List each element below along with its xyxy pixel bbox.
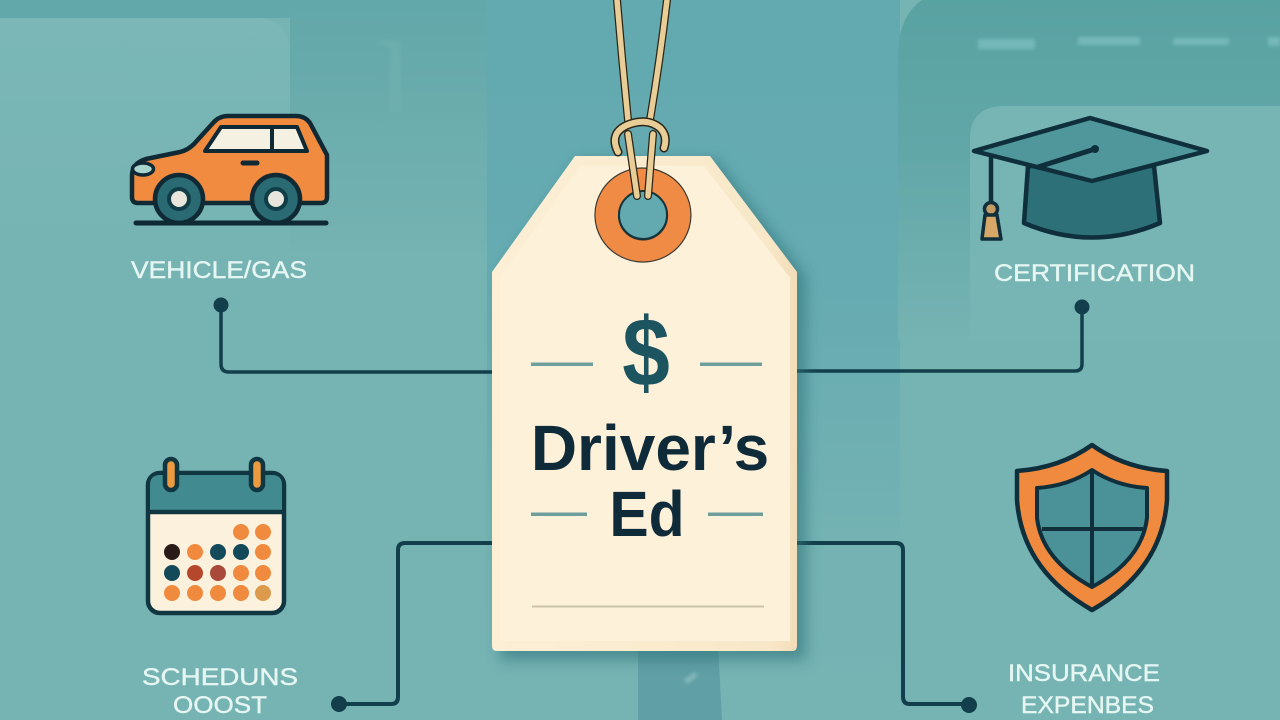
label: vehicle/gas: VEHICLE/GAS	[131, 257, 307, 284]
string	[615, 0, 667, 196]
connector: insurance to tag	[797, 543, 977, 713]
label: insurance expenses	[1008, 660, 1160, 719]
connector: scheduling to tag	[331, 543, 492, 712]
label: scheduling cost	[142, 664, 298, 719]
hole in ring	[619, 191, 667, 239]
connector: certification to tag	[797, 300, 1090, 371]
icon: calendar	[148, 459, 284, 613]
label: certification: CERTIFICATION	[994, 260, 1195, 287]
dollar sign: $	[622, 299, 670, 407]
icon: car	[132, 116, 327, 223]
label: scheduling cost: OOOST	[173, 692, 267, 719]
price tag	[492, 0, 797, 651]
tag ring	[595, 168, 691, 262]
label: insurance expenses: EXPENBES	[1021, 692, 1154, 719]
label: insurance expenses: INSURANCE	[1008, 660, 1160, 687]
tag dividers	[531, 362, 764, 608]
icon: graduation cap	[974, 118, 1207, 239]
connector: vehicle to tag	[214, 298, 492, 372]
title: Driver’s	[531, 412, 769, 484]
tag shadow	[500, 160, 806, 660]
title: Ed	[609, 479, 685, 551]
label: scheduling cost: SCHEDUNS	[142, 664, 298, 691]
icon: shield	[1017, 445, 1167, 610]
title	[531, 412, 769, 551]
